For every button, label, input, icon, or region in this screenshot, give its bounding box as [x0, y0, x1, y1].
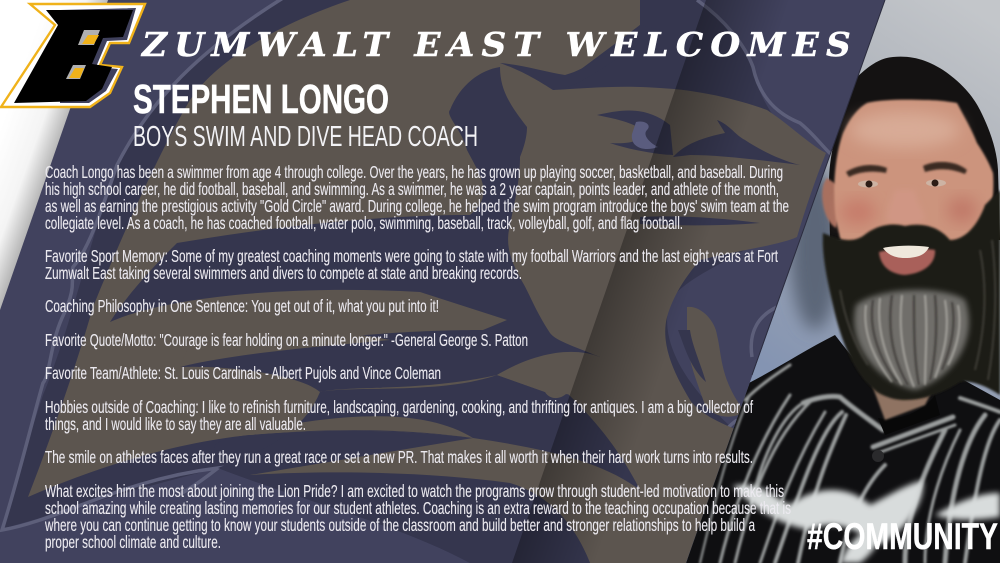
paragraph: favorite team: Favorite Team/Athlete: St. Louis Cardinals - Albert Pujols and Vince Coleman — [45, 363, 441, 383]
eyebrows — [846, 165, 887, 177]
neck — [872, 385, 935, 420]
photo edge line — [752, 0, 885, 375]
paragraph: favorite quote: Favorite Quote/Motto: "Courage is fear holding on a minute longer." -General George S. Patton — [45, 330, 528, 350]
paragraph: favorite sport memory — [45, 246, 778, 283]
lion tongue — [687, 307, 745, 417]
lion tan mass — [28, 0, 826, 563]
shirt — [686, 335, 1000, 563]
paragraph: favorite sport memory: Zumwalt East taking several swimmers and divers to compete at state and breaking records. — [45, 263, 522, 283]
lion crescent above the head — [500, 63, 582, 90]
face — [832, 98, 995, 241]
lion dark bands — [110, 67, 640, 563]
hair — [829, 57, 1000, 240]
white corner wedge — [0, 0, 108, 310]
paragraph: hobbies: things, and I would like to say they are all valuable. — [45, 414, 306, 434]
eyes — [858, 180, 878, 188]
coach name: STEPHEN LONGO — [133, 76, 389, 122]
lion tan stripes — [180, 333, 390, 367]
paragraph: coaching philosophy: Coaching Philosophy in One Sentence: You get out of it, what you put into it! — [45, 296, 439, 316]
paragraph: hobbies — [45, 397, 753, 434]
logo inset accents — [66, 30, 100, 79]
lion eye — [632, 122, 658, 149]
coach photo — [680, 0, 1000, 563]
school E logo — [1, 4, 145, 107]
mouth — [879, 246, 935, 275]
ear — [821, 178, 838, 229]
fold shadow band — [512, 0, 766, 563]
paragraph: joining the Lion Pride: proper school climate and culture. — [45, 532, 221, 552]
logo letter body — [14, 10, 133, 103]
heading: Zumwalt East Welcomes: ZUMWALT EAST WELCOMES — [140, 25, 858, 64]
paragraph: career background: collegiate level. As a coach, he has coached football, water polo, swimming, baseball, track, volleyball, golf, and flag football. — [45, 213, 683, 233]
nose — [887, 190, 925, 225]
lion eye slash — [597, 111, 673, 155]
paragraph: joining the Lion Pride — [44, 481, 791, 552]
coach role: BOYS SWIM AND DIVE HEAD COACH — [133, 121, 478, 153]
biography text — [44, 162, 791, 552]
photo backdrop — [680, 0, 1000, 563]
paragraph: career background — [45, 162, 789, 233]
lion muzzle lines — [640, 120, 800, 225]
lion dark silhouette — [5, 0, 771, 528]
beard — [823, 190, 1000, 400]
